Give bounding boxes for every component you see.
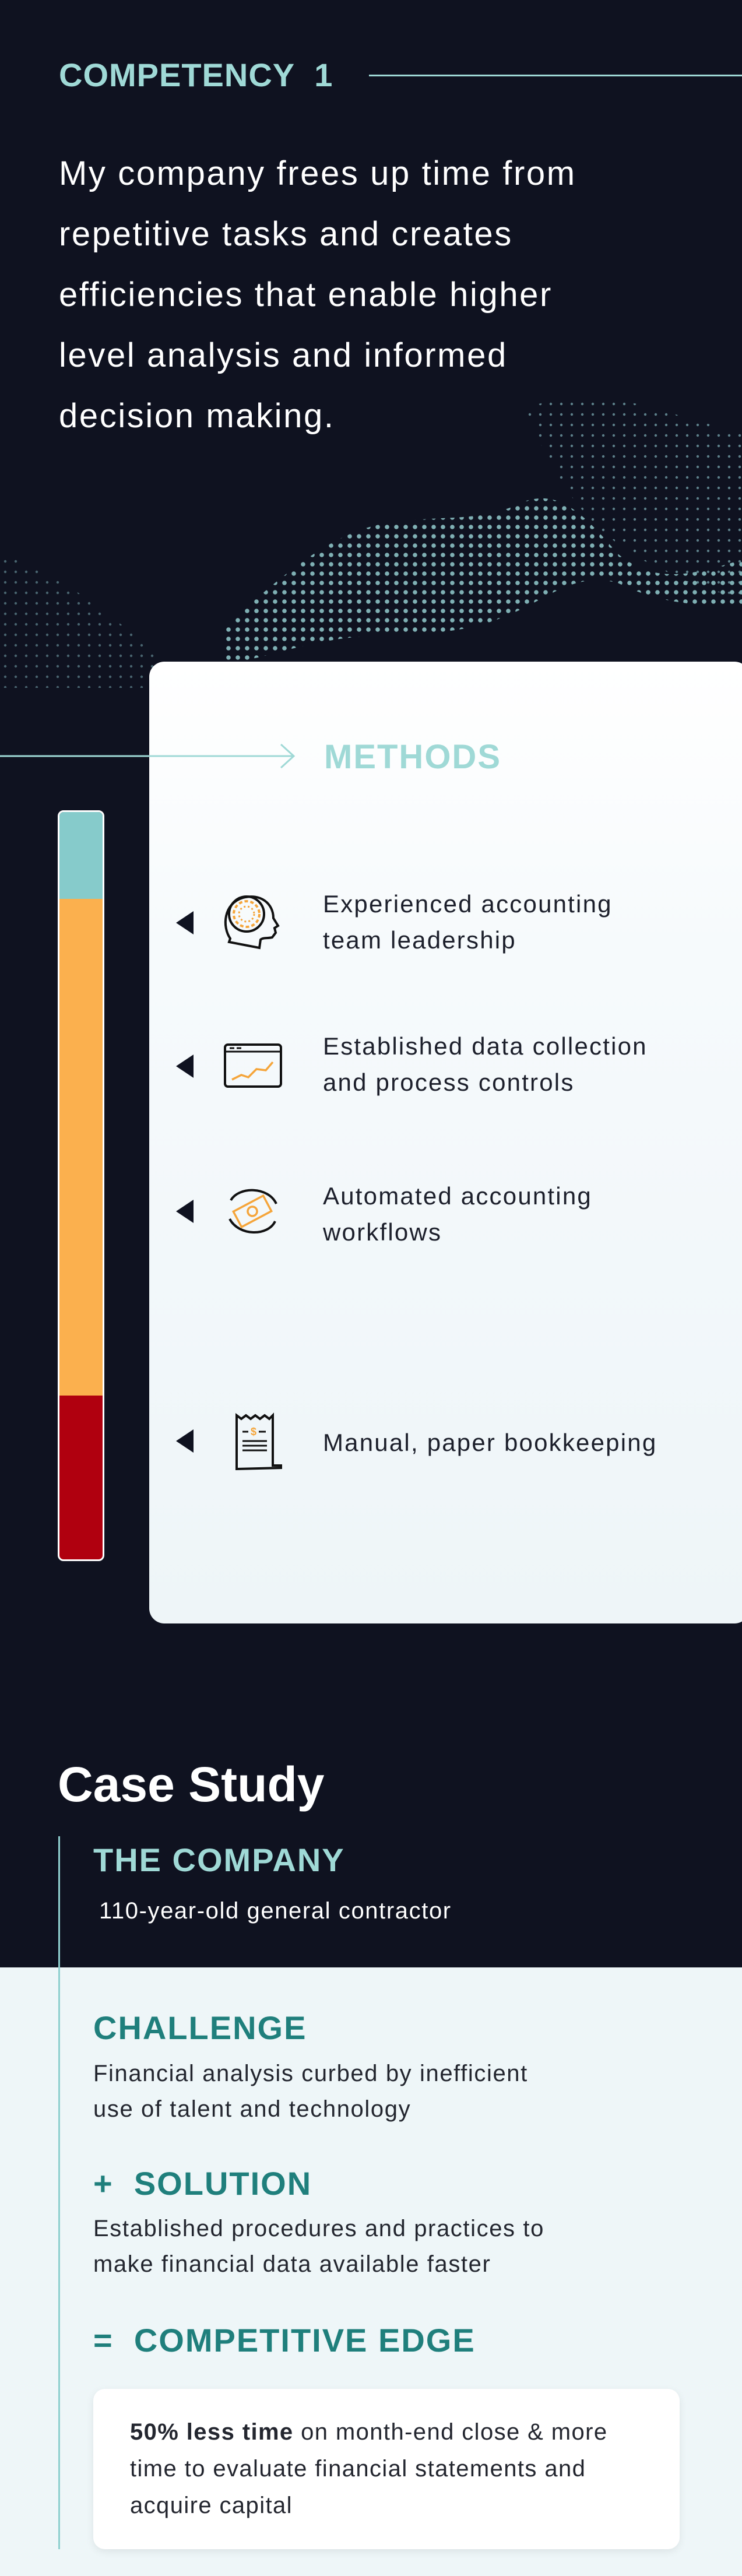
heading: methods: METHODS bbox=[324, 738, 501, 776]
statement text: decision making. bbox=[59, 397, 335, 435]
panel: methods card bbox=[149, 662, 742, 1623]
text bbox=[323, 890, 613, 954]
text: team leadership bbox=[323, 926, 516, 954]
text bbox=[323, 1032, 648, 1096]
statement text: My company frees up time from bbox=[59, 154, 576, 192]
row 2: data collection bbox=[176, 1032, 648, 1096]
text bbox=[323, 1182, 592, 1246]
solution text bbox=[93, 2216, 544, 2277]
icon: head bbox=[224, 895, 280, 949]
result callout box: 50% less time on month-end close & more bbox=[130, 2419, 607, 2445]
text: Manual, paper bookkeeping bbox=[323, 1429, 657, 1456]
text: Automated accounting bbox=[323, 1182, 592, 1210]
statement text: repetitive tasks and creates bbox=[59, 215, 513, 253]
challenge text: Financial analysis curbed by inefficient bbox=[93, 2061, 528, 2086]
result callout box: acquire capital bbox=[130, 2493, 293, 2518]
heading: competitive edge: = COMPETITIVE EDGE bbox=[93, 2322, 476, 2359]
row 1: leadership bbox=[176, 890, 613, 954]
row 4: manual bbox=[176, 1412, 657, 1470]
text: workflows bbox=[323, 1218, 442, 1246]
result callout box: time to evaluate financial statements and bbox=[130, 2456, 586, 2482]
icon: chart window bbox=[224, 1043, 282, 1088]
heading: competency 1: COMPETENCY 1 bbox=[59, 57, 333, 93]
company text: 110-year-old general contractor bbox=[99, 1898, 452, 1924]
row 3: automated bbox=[176, 1182, 592, 1246]
scale bar bbox=[58, 810, 104, 1561]
dotted wave decoration bbox=[3, 402, 742, 688]
text: and process controls bbox=[323, 1069, 575, 1096]
heading: the company: THE COMPANY bbox=[93, 1841, 345, 1878]
heading rule bbox=[369, 75, 742, 76]
statement text: level analysis and informed bbox=[59, 336, 508, 374]
icon: money cycle bbox=[228, 1189, 277, 1233]
arrow to methods bbox=[0, 744, 295, 768]
challenge text: use of talent and technology bbox=[93, 2096, 411, 2122]
statement text: efficiencies that enable higher bbox=[59, 276, 553, 314]
icon: receipt bbox=[235, 1412, 282, 1470]
text: Established data collection bbox=[323, 1032, 648, 1060]
challenge text bbox=[93, 2061, 528, 2122]
solution text: Established procedures and practices to bbox=[93, 2216, 544, 2241]
heading: solution: + SOLUTION bbox=[93, 2165, 312, 2202]
light bottom background bbox=[0, 1967, 742, 2576]
heading: case study: Case Study bbox=[58, 1757, 324, 1812]
icon: receipt: $ bbox=[251, 1426, 256, 1438]
result callout box bbox=[93, 2389, 680, 2549]
solution text: make financial data available faster bbox=[93, 2251, 491, 2277]
heading: challenge: CHALLENGE bbox=[93, 2009, 307, 2046]
timeline line bbox=[58, 1836, 60, 2549]
text: Experienced accounting bbox=[323, 890, 613, 918]
statement text bbox=[59, 154, 576, 435]
